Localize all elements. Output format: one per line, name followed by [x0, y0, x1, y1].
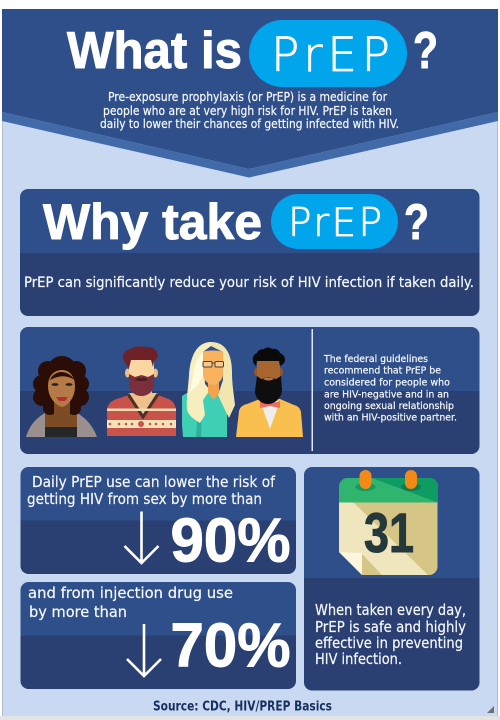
- text block: risk from sex: [27, 473, 275, 508]
- text block: injection drug use: and from injection drug use: [28, 584, 233, 602]
- heading: What is PrEP?: PrEP: [271, 28, 390, 83]
- panel: header banner: [2, 9, 498, 178]
- icon: man with black beard and yellow cardigan: [236, 348, 303, 437]
- icon: blonde woman with glasses: [182, 342, 235, 437]
- arrow: down: [124, 512, 158, 563]
- text block: safe and effective: [315, 601, 466, 668]
- icon: woman with curly hair: [26, 356, 97, 437]
- text block: federal guidelines: are HIV-negative and in an: [324, 390, 449, 400]
- divider: [312, 329, 313, 451]
- text block: PrEP definition: [100, 90, 399, 131]
- heading: Why take PrEP?: ?: [404, 194, 429, 250]
- text block: safe and effective: When taken every day,: [315, 601, 466, 619]
- text block: PrEP definition: daily to lower their chances of getting infected with HIV.: [100, 117, 399, 131]
- text block: safe and effective: effective in preventing: [315, 634, 463, 652]
- icon: calendar: [339, 470, 438, 575]
- heading: What is PrEP?: What is: [67, 22, 242, 80]
- text block: injection drug use: by more than: [29, 603, 127, 621]
- panel: people and guidelines: [20, 327, 480, 454]
- heading: Why take PrEP?: PrEP: [288, 201, 382, 246]
- text block: federal guidelines: with an HIV-positive partner.: [324, 412, 457, 424]
- text block: federal guidelines: The federal guidelines: [323, 354, 428, 365]
- text block: federal guidelines: [323, 354, 457, 424]
- panel: why take PrEP: [20, 189, 480, 316]
- source credit: Source: CDC, HIV/PREP Basics: [153, 698, 332, 714]
- arrow: down: [127, 624, 161, 676]
- text block: risk from sex: getting HIV from sex by more than: [27, 490, 262, 508]
- text block: injection drug use: [28, 584, 233, 621]
- text block: risk from sex: Daily PrEP use can lower the risk of: [32, 473, 275, 491]
- heading: Why take PrEP?: Why take: [43, 194, 262, 250]
- text block: safe and effective: HIV infection.: [315, 650, 402, 668]
- heading: What is PrEP?: ?: [413, 22, 438, 80]
- number: 70%: 70%: [170, 612, 290, 680]
- heading: Why take PrEP?: [43, 194, 429, 250]
- heading: What is PrEP?: [67, 20, 438, 87]
- text block: federal guidelines: ongoing sexual relationship: [324, 401, 454, 412]
- icon: calendar: 31: [364, 501, 414, 564]
- text block: safe and effective: PrEP is safe and highly: [315, 618, 466, 636]
- panel: 70% statistic: [20, 582, 297, 690]
- icon: resize handle: [487, 706, 494, 713]
- panel: 90% statistic: [20, 467, 297, 576]
- icon: man with red sweater: [107, 346, 176, 436]
- panel: calendar and daily use: [304, 467, 480, 691]
- text block: PrEP definition: people who are at very high risk for HIV. PrEP is taken: [103, 104, 392, 118]
- text block: federal guidelines: recommend that PrEP be: [324, 366, 441, 376]
- text block: federal guidelines: considered for people who: [324, 378, 450, 388]
- number: 90%: 90%: [170, 506, 290, 576]
- text block: PrEP definition: Pre-exposure prophylaxis (or PrEP) is a medicine for: [108, 90, 387, 104]
